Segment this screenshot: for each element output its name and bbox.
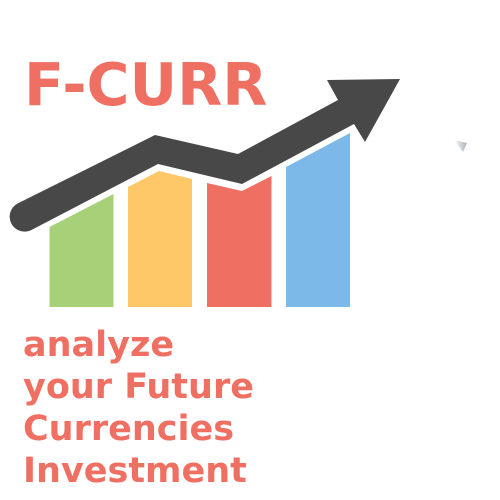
text block: tagline	[23, 325, 254, 491]
bar: yellow	[128, 171, 192, 307]
bar: red	[207, 176, 272, 307]
arrow: rising trend	[10, 79, 400, 232]
title: F-CURR	[24, 51, 267, 119]
line 1: analyze	[23, 325, 174, 365]
line 4: Investment	[23, 451, 247, 491]
line 2: your Future	[23, 367, 254, 407]
bar: blue	[286, 133, 350, 307]
smudge: grey artifact	[454, 140, 467, 152]
bar chart	[50, 133, 350, 307]
bar: green	[50, 194, 114, 307]
line 3: Currencies	[23, 409, 234, 449]
